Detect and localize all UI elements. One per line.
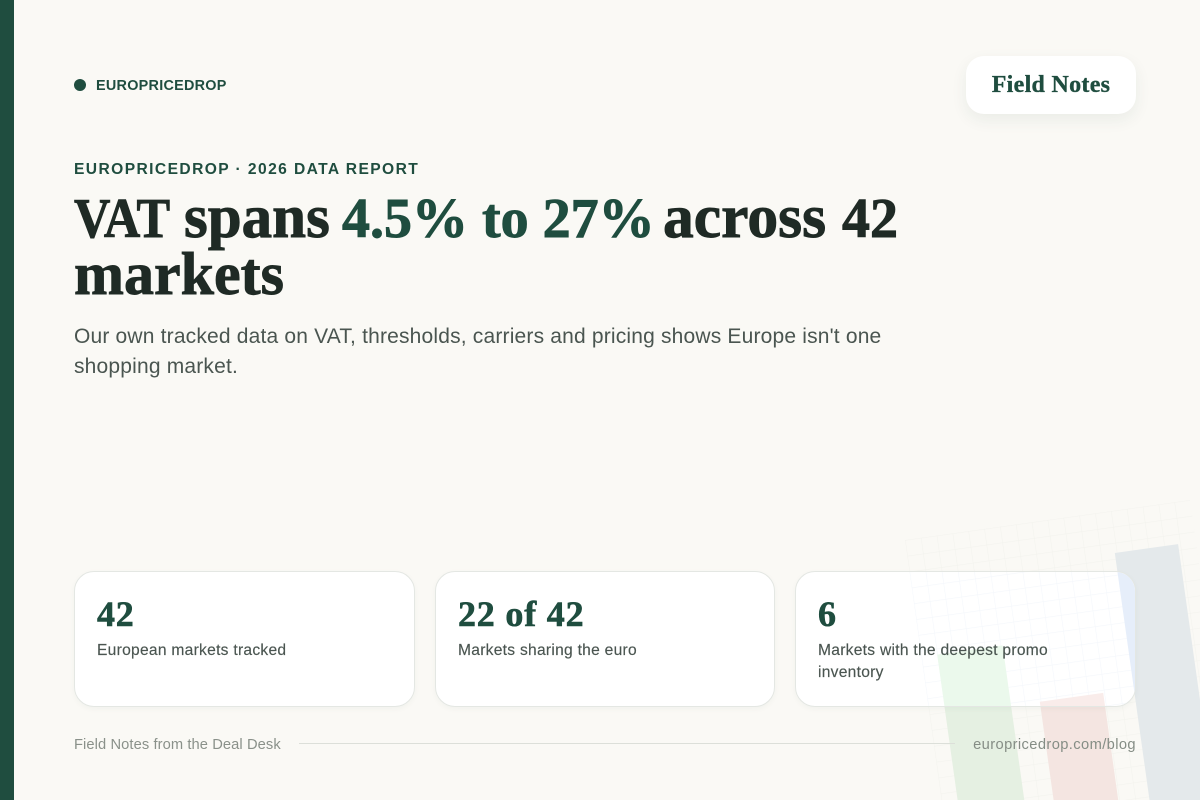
stat label xyxy=(818,642,1048,681)
stat number: 42 xyxy=(97,594,135,634)
brand name: EUROPRICEDROP xyxy=(96,78,227,94)
title xyxy=(74,183,898,306)
stat label: inventory xyxy=(818,664,884,680)
title: 42 xyxy=(842,188,898,250)
icon: brand dot xyxy=(74,79,86,91)
badge: Field Notes xyxy=(966,56,1136,114)
subtitle xyxy=(74,324,881,378)
stat label: Markets sharing the euro xyxy=(458,642,637,659)
stat card: 22 of 42 xyxy=(435,571,775,707)
brand mark xyxy=(74,78,227,94)
stat card: 6 markets xyxy=(795,571,1136,707)
stat label: European markets tracked xyxy=(97,642,286,659)
left accent bar xyxy=(0,0,14,800)
subtitle: Our own tracked data on VAT, thresholds, carriers and pricing shows Europe isn't one xyxy=(74,324,881,348)
stat number: 6 xyxy=(818,594,837,634)
title: 4.5% to 27% xyxy=(342,188,655,250)
title: markets xyxy=(74,240,284,306)
footer left text: Field Notes from the Deal Desk xyxy=(74,737,281,753)
stat card: 42 markets xyxy=(74,571,415,707)
footer rule xyxy=(299,743,955,744)
footer url: europricedrop.com/blog xyxy=(973,737,1136,753)
eyebrow: EUROPRICEDROP · 2026 DATA REPORT xyxy=(74,161,419,178)
badge: Field Notes: Field Notes xyxy=(992,72,1110,98)
subtitle: shopping market. xyxy=(74,354,238,378)
title: spans xyxy=(184,184,330,251)
title: across xyxy=(663,183,826,251)
stat label: Markets with the deepest promo xyxy=(818,642,1048,659)
title: VAT xyxy=(74,188,170,250)
stat number: 22 of 42 xyxy=(458,594,584,634)
